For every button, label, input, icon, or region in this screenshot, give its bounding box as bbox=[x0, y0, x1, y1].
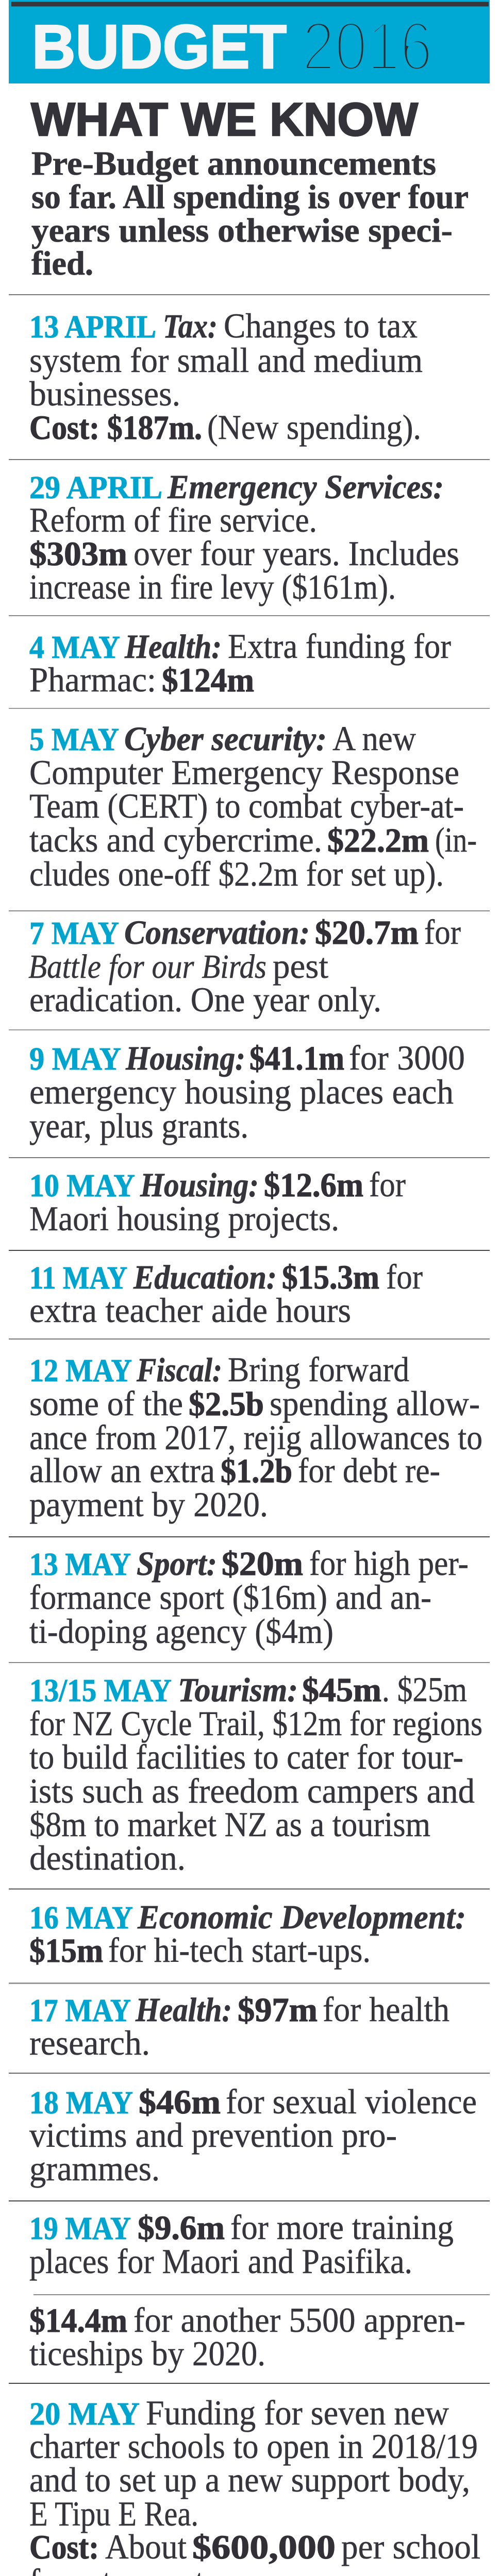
item: 16 May economic development bbox=[29, 1899, 466, 1970]
item: 4 May health bbox=[29, 626, 451, 699]
item: 16 May economic development: Economic Development: bbox=[137, 1899, 466, 1936]
item: 20 May charter schools: E Tipu E Rea. bbox=[29, 2494, 198, 2533]
item: 19 May training places: places for Maori and Pasifika. bbox=[29, 2242, 412, 2281]
date: 12 May: 12 MAY bbox=[29, 1353, 132, 1388]
item: 5 May cyber security: (in- bbox=[435, 820, 477, 859]
item: 20 May charter schools bbox=[29, 2393, 480, 2576]
item: 18 May sexual violence: $46m bbox=[139, 2083, 221, 2121]
item: 29 April emergency services: $303m bbox=[29, 535, 127, 573]
item: 17 May health: research. bbox=[29, 2023, 150, 2062]
item: 9 May housing: Housing: bbox=[125, 1040, 245, 1077]
item: 12 May fiscal: Fiscal: bbox=[136, 1351, 222, 1389]
item: 20 May charter schools: charter schools to open in 2018/19 bbox=[29, 2427, 478, 2466]
item: 13 April tax: Tax: bbox=[163, 308, 218, 345]
date: 20 May: 20 MAY bbox=[29, 2397, 140, 2432]
item: 16 May economic development: $15m bbox=[29, 1932, 103, 1970]
item: 29 April emergency services: over four years. Includes bbox=[134, 534, 459, 573]
item: 12 May fiscal: Bring forward bbox=[228, 1350, 409, 1389]
intro text block: Pre-Budget announcements bbox=[31, 145, 436, 182]
item: 13/15 May tourism: . $25m bbox=[382, 1670, 467, 1709]
item: 12 May fiscal: $1.2b bbox=[221, 1452, 292, 1490]
date: 17 May: 17 MAY bbox=[29, 1993, 131, 2028]
item: 7 May conservation: pest bbox=[273, 946, 328, 986]
item: 11 May education: for bbox=[386, 1257, 423, 1296]
title: BUDGET 2016 bbox=[32, 8, 432, 85]
intro text block: fied. bbox=[31, 245, 93, 282]
item: 7 May conservation: eradication. One year only. bbox=[29, 980, 381, 1019]
item: 12 May fiscal bbox=[29, 1350, 482, 1524]
item: 13 April tax: (New spending). bbox=[207, 408, 421, 447]
item: 5 May cyber security: Team (CERT) to combat cyber-at- bbox=[29, 786, 464, 825]
date: 13 May: 13 MAY bbox=[29, 1547, 131, 1582]
item: 13/15 May tourism: ists such as freedom campers and bbox=[29, 1771, 475, 1810]
item: apprenticeships bbox=[29, 2300, 465, 2373]
item: 13 May sport: formance sport ($16m) and an- bbox=[29, 1578, 431, 1617]
date: 4 May: 4 MAY bbox=[29, 630, 120, 665]
item: apprenticeships: for another 5500 appren- bbox=[134, 2300, 465, 2340]
item: 20 May charter schools: $600,000 bbox=[192, 2529, 336, 2566]
item: 29 April emergency services: Emergency Services: bbox=[167, 468, 444, 506]
item: 7 May conservation: $20.7m bbox=[315, 914, 419, 952]
item: 18 May sexual violence: for sexual violence bbox=[226, 2082, 477, 2121]
item: 12 May fiscal: for debt re- bbox=[298, 1451, 440, 1490]
item: 5 May cyber security bbox=[29, 719, 477, 893]
date: 13 April: 13 APRIL bbox=[29, 310, 156, 345]
item: 10 May housing: $12.6m bbox=[264, 1166, 363, 1204]
date: 19 May: 19 MAY bbox=[29, 2211, 131, 2246]
item: 13 May sport bbox=[29, 1544, 469, 1651]
item: 13 May sport: ti-doping agency ($4m) bbox=[29, 1612, 334, 1651]
item: 13 May sport: for high per- bbox=[309, 1544, 469, 1583]
title: BUDGET 2016: BUDGET bbox=[32, 12, 287, 81]
item: 12 May fiscal: allow an extra bbox=[29, 1451, 215, 1490]
amount: $14.4m: $14.4m bbox=[29, 2302, 127, 2340]
item: 7 May conservation bbox=[28, 912, 461, 1019]
item: 4 May health: $124m bbox=[162, 662, 254, 699]
item: 11 May education: Education: bbox=[133, 1259, 277, 1296]
date: 5 May: 5 MAY bbox=[29, 722, 119, 757]
date: 18 May: 18 MAY bbox=[29, 2086, 133, 2121]
item: apprenticeships: ticeships by 2020. bbox=[29, 2334, 265, 2373]
item: 17 May health: Health: bbox=[135, 1991, 232, 2029]
item: 12 May fiscal: some of the bbox=[29, 1384, 183, 1423]
item: 18 May sexual violence: victims and prevention pro- bbox=[29, 2115, 397, 2155]
item: 5 May cyber security: $22.2m bbox=[327, 822, 429, 859]
item: 18 May sexual violence bbox=[29, 2082, 477, 2188]
item: 10 May housing: Maori housing projects. bbox=[29, 1199, 339, 1238]
date: 11 May: 11 MAY bbox=[29, 1261, 127, 1296]
intro text block bbox=[31, 145, 469, 282]
item: 13 April tax: businesses. bbox=[29, 374, 180, 413]
item: 13/15 May tourism: $45m bbox=[302, 1671, 381, 1709]
intro text block: so far. All spending is over four bbox=[31, 178, 469, 216]
intro text block: years unless otherwise speci- bbox=[31, 212, 453, 249]
item: 9 May housing: for 3000 bbox=[349, 1038, 465, 1077]
item: 5 May cyber security: Cyber security: bbox=[124, 720, 327, 758]
item: 4 May health: Health: bbox=[124, 628, 222, 666]
item: 9 May housing: emergency housing places each bbox=[29, 1072, 454, 1111]
item: 11 May education: $15.3m bbox=[282, 1259, 379, 1296]
item: 11 May education bbox=[29, 1257, 423, 1330]
item: 10 May housing: Housing: bbox=[140, 1166, 259, 1204]
item: 4 May health: Pharmac: bbox=[29, 660, 156, 699]
item: 20 May charter schools: Funding for seven new bbox=[146, 2393, 449, 2432]
item: 20 May charter schools: About bbox=[105, 2527, 187, 2566]
heading: WHAT WE KNOW: WHAT WE KNOW bbox=[31, 94, 418, 146]
item: 7 May conservation: Battle for our Birds bbox=[28, 948, 266, 986]
item: 13 April tax bbox=[29, 306, 423, 447]
item: 12 May fiscal: payment by 2020. bbox=[29, 1485, 268, 1524]
item: 4 May health: Extra funding for bbox=[228, 626, 451, 666]
item: 9 May housing bbox=[29, 1038, 465, 1145]
date: 13/15 May: 13/15 MAY bbox=[29, 1673, 172, 1708]
item: 12 May fiscal: $2.5b bbox=[189, 1385, 264, 1423]
item: 19 May training places bbox=[29, 2208, 454, 2281]
panel: header banner bbox=[9, 0, 490, 85]
item: 17 May health: $97m bbox=[238, 1991, 318, 2029]
item: 29 April emergency services: increase in fire levy ($161m). bbox=[29, 567, 396, 606]
item: 10 May housing: for bbox=[369, 1165, 406, 1204]
item: 7 May conservation: Conservation: bbox=[124, 914, 310, 952]
item: 10 May housing bbox=[29, 1165, 406, 1238]
item: 9 May housing: year, plus grants. bbox=[29, 1106, 248, 1145]
item: 13 April tax: Cost: $187m. bbox=[29, 409, 202, 447]
item: 29 April emergency services: Reform of fire service. bbox=[29, 500, 317, 539]
item: 17 May health bbox=[29, 1990, 449, 2062]
date: 7 May: 7 MAY bbox=[29, 916, 119, 951]
title: BUDGET 2016: 2016 bbox=[302, 8, 432, 85]
item: 17 May health: for health bbox=[323, 1990, 449, 2029]
item: 13 May sport: Sport: bbox=[137, 1545, 217, 1583]
item: 13 April tax: Changes to tax bbox=[224, 306, 418, 345]
item: 13/15 May tourism: Tourism: bbox=[178, 1671, 298, 1709]
item: 20 May charter schools: and to set up a new support body, bbox=[29, 2460, 470, 2499]
item: 11 May education: extra teacher aide hours bbox=[29, 1291, 351, 1330]
item: 20 May charter schools: per school bbox=[341, 2527, 480, 2566]
item: 13/15 May tourism: to build facilities to cater for tour- bbox=[29, 1737, 463, 1776]
item: 29 April emergency services bbox=[29, 468, 459, 606]
item: 7 May conservation: for bbox=[424, 912, 461, 952]
item: 12 May fiscal: spending allow- bbox=[270, 1384, 480, 1423]
item: 18 May sexual violence: grammes. bbox=[29, 2149, 160, 2188]
date: 29 April: 29 APRIL bbox=[29, 470, 162, 505]
item: 13 May sport: $20m bbox=[222, 1545, 303, 1583]
item: 19 May training places: $9.6m bbox=[138, 2209, 225, 2247]
item: 5 May cyber security: Computer Emergency Response bbox=[29, 753, 459, 792]
item: 5 May cyber security: A new bbox=[332, 719, 416, 758]
date: 9 May: 9 MAY bbox=[29, 1042, 121, 1077]
item: 13 April tax: system for small and medium bbox=[29, 341, 423, 380]
item: 5 May cyber security: tacks and cybercrime. bbox=[29, 820, 322, 859]
date: 16 May: 16 MAY bbox=[29, 1901, 133, 1936]
item: 20 May charter schools: Cost: bbox=[29, 2529, 99, 2566]
item: 16 May economic development: for hi-tech start-ups. bbox=[108, 1930, 371, 1970]
item: 5 May cyber security: cludes one-off $2.2m for set up). bbox=[29, 854, 444, 893]
item: 13/15 May tourism: $8m to market NZ as a tourism bbox=[29, 1805, 430, 1844]
item: 13/15 May tourism: destination. bbox=[29, 1838, 186, 1877]
item: 9 May housing: $41.1m bbox=[249, 1040, 344, 1077]
item: 13/15 May tourism bbox=[29, 1670, 482, 1877]
date: 10 May: 10 MAY bbox=[29, 1168, 135, 1204]
item: 19 May training places: for more training bbox=[230, 2208, 454, 2247]
